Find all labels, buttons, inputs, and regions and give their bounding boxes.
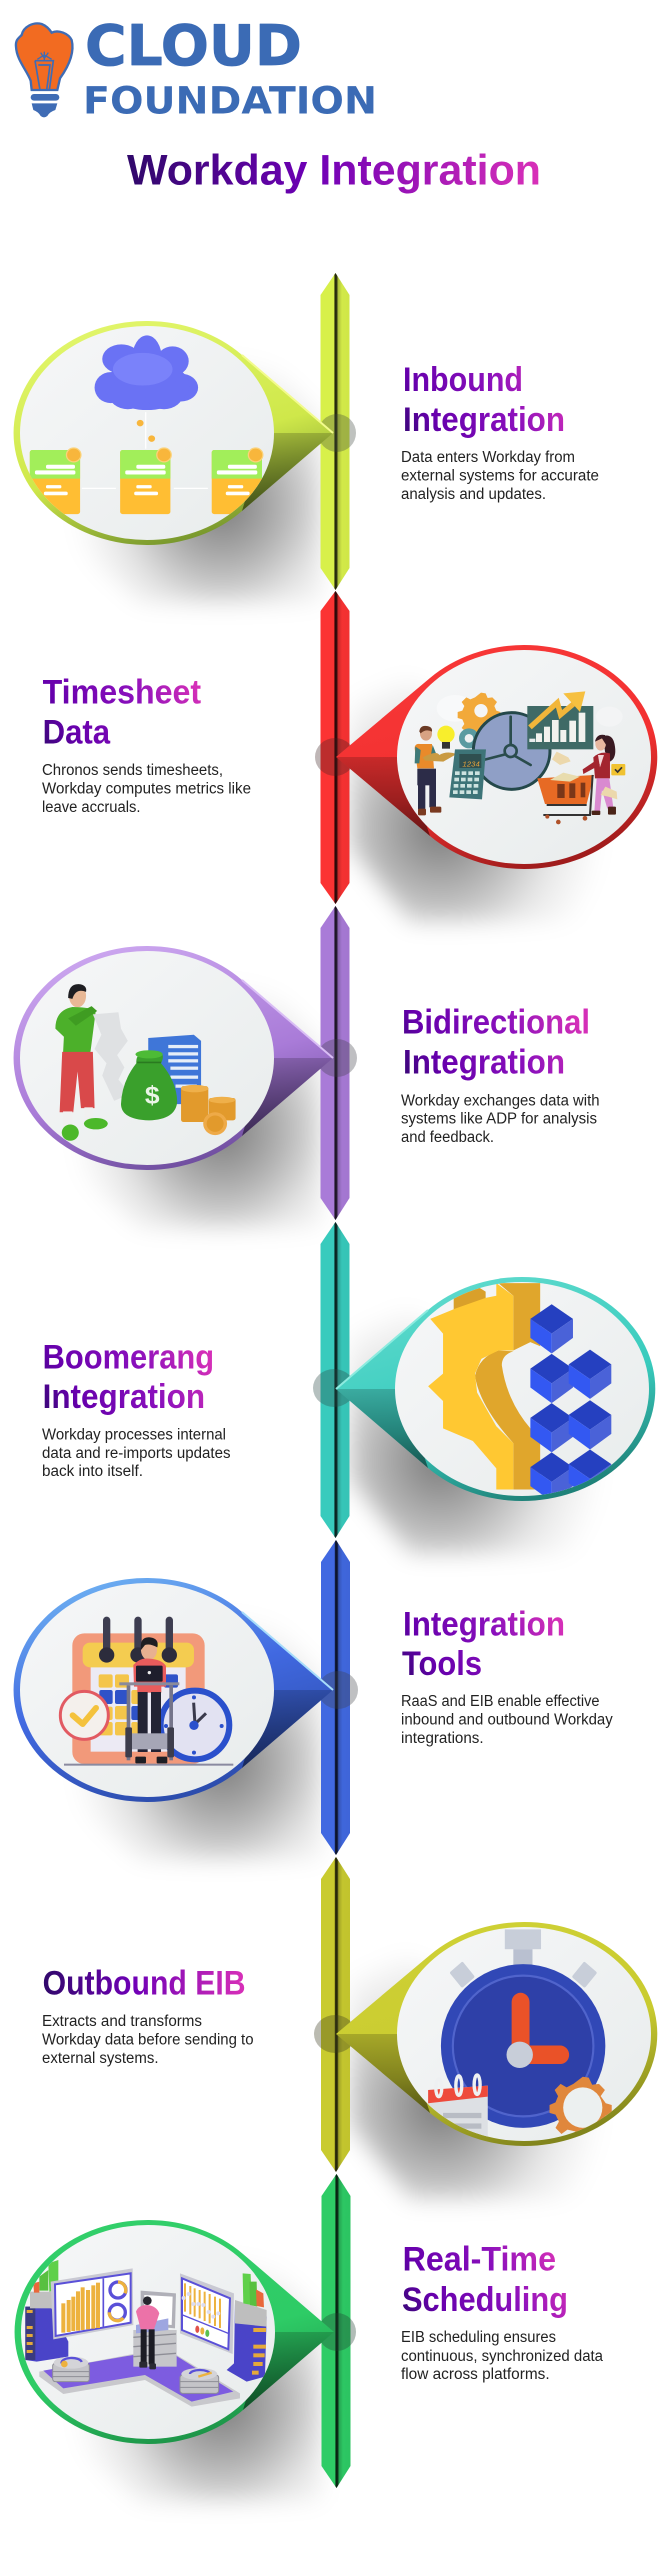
text: Integration Tools description: integrations. bbox=[401, 1730, 484, 1747]
timeline bar segment 6 bbox=[321, 1857, 350, 2172]
icon: person with receipt and money: $ bbox=[145, 1082, 160, 1109]
heading: Timesheet Data: Timesheet bbox=[43, 674, 201, 712]
icon: person with receipt and money bbox=[55, 984, 236, 1141]
callout bubble 3 bbox=[14, 946, 333, 1170]
text: Bidirectional description: systems like ADP for analysis bbox=[401, 1110, 597, 1128]
panel: Real-Time Scheduling bbox=[15, 2220, 356, 2444]
text: Inbound description: Data enters Workday from bbox=[401, 449, 575, 466]
timeline bar segment 4 bbox=[320, 1222, 350, 1538]
heading: Inbound Integration: Inbound bbox=[403, 361, 523, 399]
icon: light bulb bbox=[16, 23, 73, 117]
text: Timesheet description bbox=[42, 762, 251, 816]
heading: Integration Tools: Tools bbox=[402, 1645, 482, 1683]
text: Outbound description: external systems. bbox=[42, 2050, 158, 2067]
logo: Cloud Foundation bbox=[16, 14, 377, 122]
text: Bidirectional description: and feedback. bbox=[401, 1129, 494, 1146]
text: Boomerang description: Workday processes internal bbox=[42, 1427, 226, 1444]
heading: Boomerang Integration: Boomerang bbox=[43, 1339, 214, 1377]
text: Boomerang description: back into itself. bbox=[42, 1463, 143, 1480]
logo word: FOUNDATION: FOUNDATION bbox=[83, 80, 377, 122]
text: Real-Time description: continuous, synchronized data bbox=[401, 2348, 603, 2365]
icon: cloud and connected systems bbox=[30, 335, 263, 514]
text: Timesheet description: Chronos sends timesheets, bbox=[42, 762, 223, 779]
heading: Real-Time Scheduling: Scheduling bbox=[402, 2281, 568, 2319]
heading: Boomerang Integration: Integration bbox=[43, 1378, 205, 1416]
timeline bar segment 1 bbox=[320, 273, 350, 590]
callout bubble 2 bbox=[336, 645, 657, 869]
text: Integration Tools description: inbound and outbound Workday bbox=[401, 1712, 613, 1729]
panel: Integration Tools bbox=[14, 1578, 358, 1802]
text: Bidirectional description: Workday exchanges data with bbox=[401, 1092, 600, 1110]
text: Real-Time description: EIB scheduling ensures bbox=[401, 2329, 556, 2346]
panel: Inbound Integration bbox=[14, 321, 356, 545]
text: Integration Tools description: RaaS and EIB enable effective bbox=[401, 1693, 600, 1710]
icon: dashboard control room bbox=[25, 2260, 267, 2407]
text: Outbound description bbox=[42, 2013, 254, 2067]
text: Integration Tools description bbox=[401, 1693, 613, 1747]
panel: Outbound EIB bbox=[314, 1922, 657, 2146]
callout bubble 7 bbox=[15, 2220, 334, 2444]
timeline bar segment 2 bbox=[320, 591, 350, 904]
panel: Bidirectional Integration bbox=[14, 946, 357, 1170]
heading: Boomerang Integration bbox=[43, 1339, 214, 1416]
heading: Timesheet Data: Data bbox=[43, 714, 111, 752]
timeline bar segment 5 bbox=[321, 1540, 350, 1855]
heading: Outbound EIB: Outbound EIB bbox=[43, 1965, 246, 2003]
heading: Integration Tools: Integration bbox=[403, 1605, 565, 1643]
icon: stopwatch, calendar and gear bbox=[428, 1929, 612, 2143]
drop shadows behind callouts bbox=[50, 328, 645, 2502]
icon: clock, calculator, chart, people bbox=[415, 691, 625, 824]
heading: Integration Tools bbox=[402, 1605, 565, 1683]
text: Inbound description: external systems for accurate bbox=[401, 468, 599, 484]
text: Timesheet description: Workday computes metrics like bbox=[42, 780, 251, 798]
heading: Bidirectional Integration bbox=[402, 1004, 590, 1082]
text: Bidirectional description bbox=[401, 1092, 600, 1146]
heading: Bidirectional Integration: Bidirectional bbox=[402, 1004, 590, 1042]
heading: Inbound Integration: Integration bbox=[403, 401, 565, 439]
icon: clock, calculator, chart, people: 1234 bbox=[462, 762, 480, 770]
text: Outbound description: Extracts and transforms bbox=[42, 2013, 202, 2030]
title: Workday Integration bbox=[127, 146, 541, 194]
heading: Real-Time Scheduling bbox=[402, 2240, 568, 2319]
callout bubble 6 bbox=[336, 1922, 657, 2146]
callout bubble 1 bbox=[14, 321, 333, 545]
text: Inbound description: analysis and updates. bbox=[401, 486, 546, 503]
text: Timesheet description: leave accruals. bbox=[42, 799, 140, 816]
text: Inbound description bbox=[401, 449, 599, 503]
text: Real-Time description bbox=[401, 2329, 603, 2383]
icon: gear and blue cubes bbox=[428, 1281, 611, 1502]
callout bubble 5 bbox=[14, 1578, 333, 1802]
panel: Boomerang Integration bbox=[313, 1277, 655, 1502]
icon: calendar, clock and person bbox=[60, 1617, 233, 1766]
timeline bar segment 3 bbox=[320, 906, 350, 1220]
text: Real-Time description: flow across platforms. bbox=[401, 2366, 550, 2383]
logo word: CLOUD: CLOUD bbox=[85, 14, 302, 79]
text: Outbound description: Workday data before sending to bbox=[42, 2032, 254, 2049]
panel: Timesheet Data bbox=[315, 645, 657, 869]
heading: Inbound Integration bbox=[403, 361, 565, 439]
callout bubble 4 bbox=[336, 1277, 655, 1501]
heading: Timesheet Data bbox=[43, 674, 201, 752]
text: Boomerang description bbox=[42, 1427, 231, 1480]
heading: Bidirectional Integration: Integration bbox=[403, 1044, 565, 1082]
heading: Real-Time Scheduling: Real-Time bbox=[403, 2240, 556, 2278]
timeline bar segment 7 bbox=[322, 2174, 350, 2488]
text: Boomerang description: data and re-imports updates bbox=[42, 1445, 231, 1462]
